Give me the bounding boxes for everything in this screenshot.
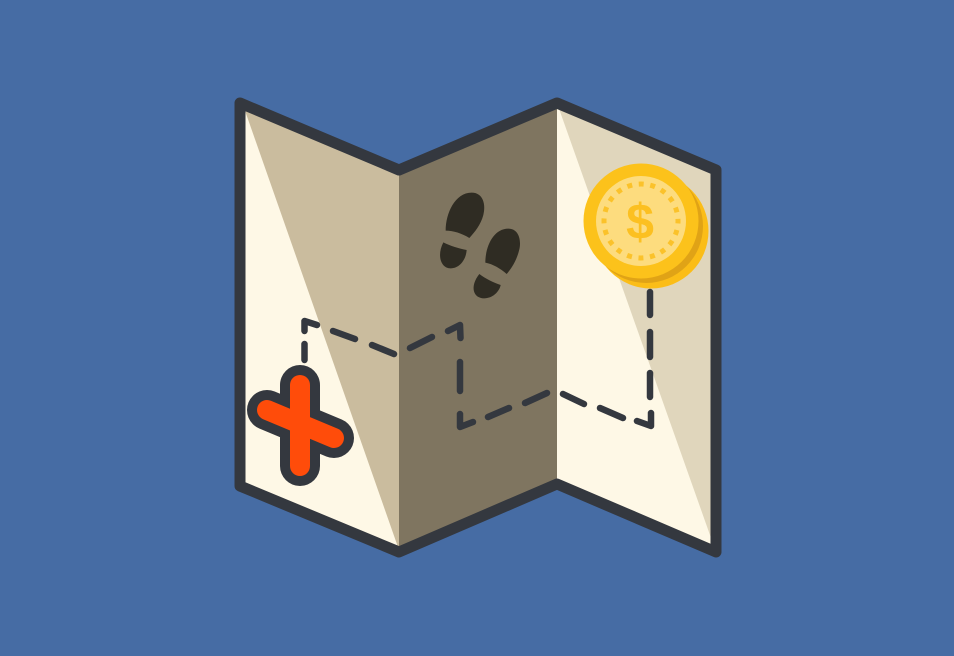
panel: left fold <box>240 103 399 552</box>
icon: gold coin <box>584 164 708 288</box>
dashed route <box>304 292 651 427</box>
folded map <box>240 103 716 552</box>
panel: centre fold <box>399 103 557 552</box>
panel: right fold <box>557 103 716 552</box>
map outline <box>240 103 716 552</box>
dollar sign: $ <box>626 194 654 250</box>
icon: footprints <box>440 193 520 298</box>
icon: red X marker <box>267 385 334 466</box>
